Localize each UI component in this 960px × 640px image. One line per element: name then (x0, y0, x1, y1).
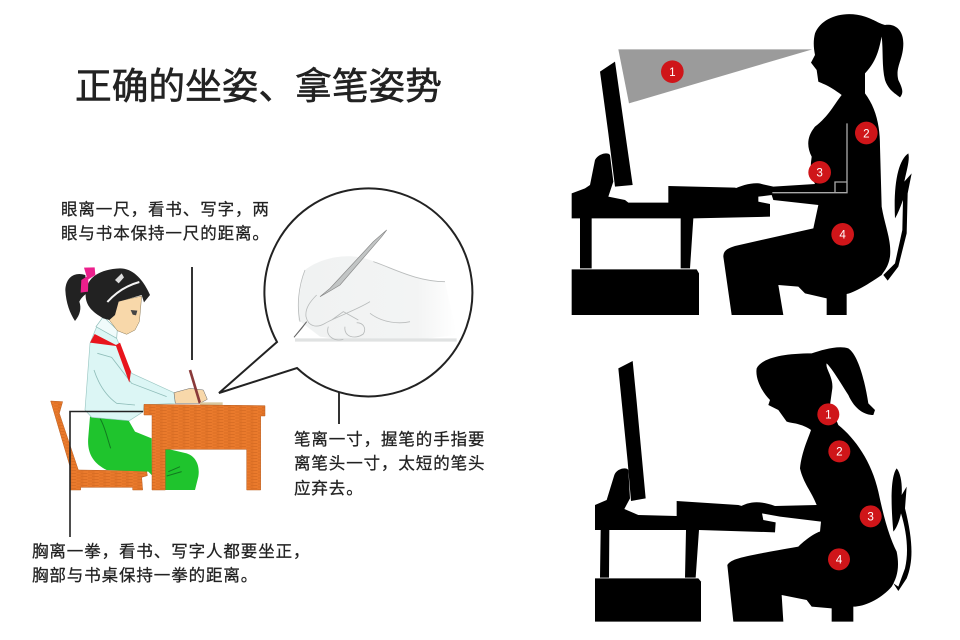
marker 2: 2 (863, 127, 870, 140)
text block: eye distance: 眼离一尺，看书、写字，两 (61, 200, 270, 219)
title: 正确的坐姿、拿笔姿势 (75, 66, 442, 107)
hair band (107, 282, 139, 302)
text block: pen distance (294, 430, 485, 498)
illustration: girl writing at desk (51, 267, 265, 490)
drawer unit (595, 578, 701, 622)
trousers (88, 417, 199, 490)
hair (86, 268, 150, 320)
text block: chest distance (32, 542, 310, 585)
ponytail (65, 274, 87, 321)
monitor (600, 62, 633, 187)
desk (144, 404, 265, 490)
hair clip (115, 273, 124, 283)
leader line: pen (338, 371, 340, 424)
shirt (85, 327, 175, 421)
pencil (190, 370, 200, 403)
marker 2 (828, 440, 850, 462)
hands (174, 388, 207, 403)
speech bubble (219, 188, 472, 396)
desk and keyboard (595, 468, 776, 578)
text block: pen distance: 应弃去。 (294, 479, 364, 498)
neck and collar (96, 317, 117, 338)
text block: chest distance: 胸离一拳，看书、写字人都要坐正， (32, 542, 310, 561)
leader line: chest (70, 412, 143, 537)
marker 1 (817, 403, 839, 425)
marker 4: 4 (836, 554, 843, 567)
text block: chest distance: 胸部与书桌保持一拳的距离。 (32, 566, 258, 585)
face (109, 296, 142, 334)
paper (200, 402, 223, 405)
marker 4 (831, 223, 854, 246)
red scarf (90, 334, 131, 383)
desk and keyboard (572, 153, 770, 268)
chair back (892, 468, 911, 591)
trouser creases (100, 418, 182, 476)
marker 4 (828, 548, 850, 570)
marker 1: 1 (825, 409, 832, 422)
viewing cone (618, 49, 812, 103)
marker 3: 3 (867, 511, 874, 524)
right-angle guide (772, 123, 847, 193)
marker 3: 3 (816, 167, 823, 180)
marker 2 (855, 122, 878, 144)
eye (131, 310, 137, 315)
marker 3 (860, 505, 882, 527)
leader line: eye (191, 267, 193, 360)
marker 1: 1 (669, 66, 676, 79)
text block: pen distance: 离笔头一寸，太短的笔头 (294, 454, 485, 473)
text block: eye distance (61, 200, 270, 243)
hand shading (295, 335, 457, 345)
chair back (883, 153, 912, 281)
silhouette: correct posture (572, 14, 912, 315)
text block: pen distance: 笔离一寸，握笔的手指要 (294, 430, 485, 449)
silhouette: slouched posture (595, 347, 911, 622)
hair ribbon (81, 267, 95, 293)
text block: eye distance: 眼与书本保持一尺的距离。 (61, 224, 270, 243)
marker 3 (808, 161, 831, 184)
marker 4: 4 (839, 229, 846, 242)
drawer unit (572, 269, 699, 315)
marker 1 (661, 60, 684, 83)
woman (727, 347, 898, 622)
finger lines (298, 262, 445, 340)
shirt sleeve lines (94, 353, 167, 405)
pen (320, 230, 387, 297)
woman (723, 14, 903, 315)
pen tip (294, 322, 307, 337)
illustration: hand holding pen (294, 230, 457, 340)
monitor (618, 361, 646, 501)
marker 2: 2 (836, 446, 843, 459)
ear (103, 303, 109, 314)
hand (298, 256, 457, 340)
chair (51, 401, 147, 490)
